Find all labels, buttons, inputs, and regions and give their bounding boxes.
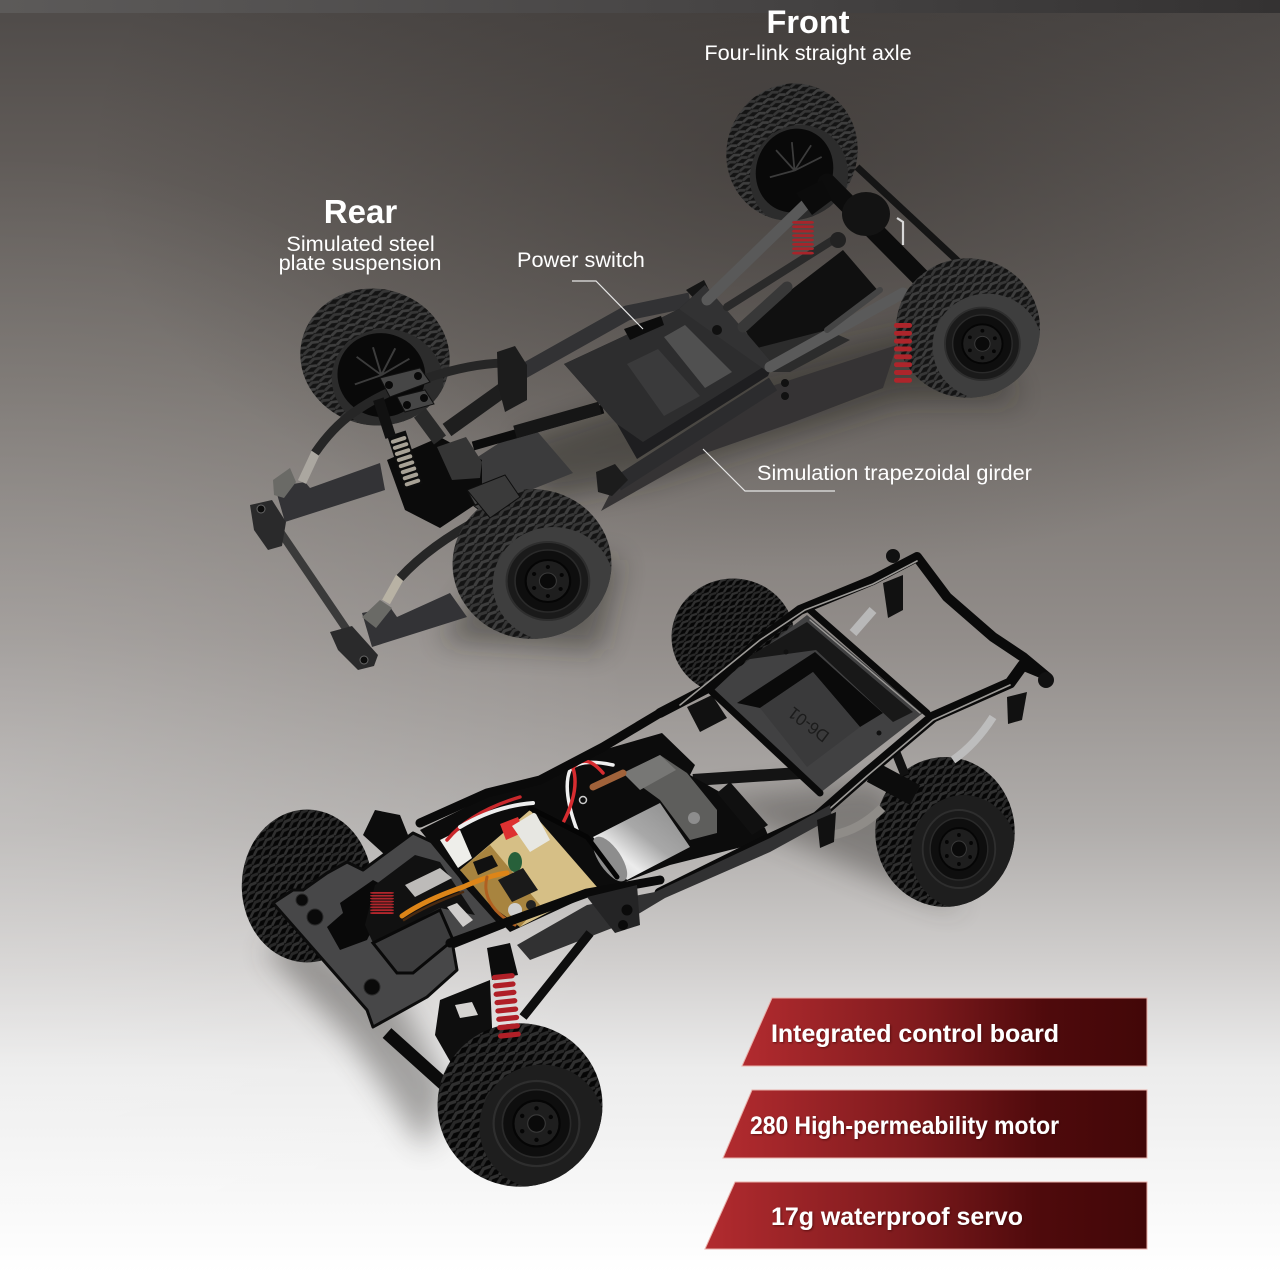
bottom chassis: top view bbox=[242, 549, 1054, 1189]
front title: Front bbox=[766, 4, 850, 40]
front red spring near bbox=[894, 323, 912, 383]
wheel: rear near bbox=[452, 489, 614, 641]
battery box bbox=[564, 285, 789, 459]
frame side panel bbox=[601, 345, 897, 511]
rear title: Rear bbox=[324, 193, 397, 230]
near leaf bracket over wheel bbox=[467, 475, 520, 518]
leaf springs bbox=[302, 363, 507, 602]
top chassis: underside view with labels bbox=[250, 4, 1042, 670]
wheel: left bbox=[242, 810, 372, 962]
rear subtitle: plate suspension bbox=[279, 250, 441, 275]
shock: rear silver bbox=[387, 430, 423, 490]
drive shaft bbox=[693, 773, 800, 780]
frame brackets bbox=[587, 549, 1054, 933]
rear axle and shock bbox=[373, 368, 603, 528]
banner: integrated control board: Integrated control board bbox=[771, 1020, 1059, 1048]
rear suspension links bbox=[387, 933, 590, 1087]
wheel: rear far bbox=[287, 275, 463, 442]
rear subtitle: Simulated steel bbox=[286, 231, 435, 256]
battery tray bbox=[710, 615, 923, 793]
bay floor window bbox=[717, 782, 768, 835]
banner: servo bbox=[705, 1182, 1147, 1249]
feature banners bbox=[705, 998, 1147, 1249]
front axle bbox=[796, 167, 960, 287]
shadow of top chassis bbox=[440, 320, 1020, 650]
wheel: right bbox=[875, 757, 1017, 909]
front axle parts and leaf springs bbox=[687, 610, 993, 835]
rear plate bbox=[273, 833, 503, 1027]
gearbox bbox=[623, 755, 717, 840]
main frame rails bbox=[497, 280, 773, 496]
front subtitle: Four-link straight axle bbox=[704, 40, 912, 65]
front red spring far bbox=[792, 221, 814, 255]
floor between axles bbox=[473, 423, 573, 493]
battery tray: D6-01 bbox=[784, 703, 833, 746]
callout: power switch bbox=[517, 247, 645, 329]
shadow of bottom chassis bbox=[264, 780, 960, 1150]
motor bay bbox=[420, 733, 770, 932]
wheel: front far bbox=[706, 65, 877, 242]
front links bbox=[707, 203, 833, 327]
callout: power switch: Power switch bbox=[517, 247, 645, 272]
callout: trapezoidal girder bbox=[703, 449, 1032, 491]
wires bbox=[402, 761, 623, 925]
frame rails bbox=[420, 557, 1047, 943]
wheel: front near bbox=[896, 258, 1042, 400]
wheel: far front bbox=[672, 578, 794, 696]
near front links bbox=[770, 290, 903, 367]
banner: motor: 280 High-permeability motor bbox=[750, 1112, 1059, 1140]
rear crossbar assembly bbox=[250, 463, 467, 670]
motor bbox=[586, 803, 690, 887]
wheel: near bbox=[438, 1023, 605, 1189]
red shock bbox=[487, 943, 521, 1039]
banner: servo: 17g waterproof servo bbox=[771, 1203, 1023, 1231]
callout: trapezoidal girder: Simulation trapezoidal girder bbox=[757, 460, 1032, 485]
banner: integrated control board bbox=[742, 998, 1147, 1066]
control board bbox=[440, 810, 597, 927]
leaf brackets bbox=[380, 368, 520, 518]
banner: motor bbox=[723, 1090, 1147, 1158]
front floor bbox=[745, 250, 880, 350]
lower frame band bbox=[517, 805, 832, 960]
upper rear shock mount bbox=[363, 810, 408, 855]
